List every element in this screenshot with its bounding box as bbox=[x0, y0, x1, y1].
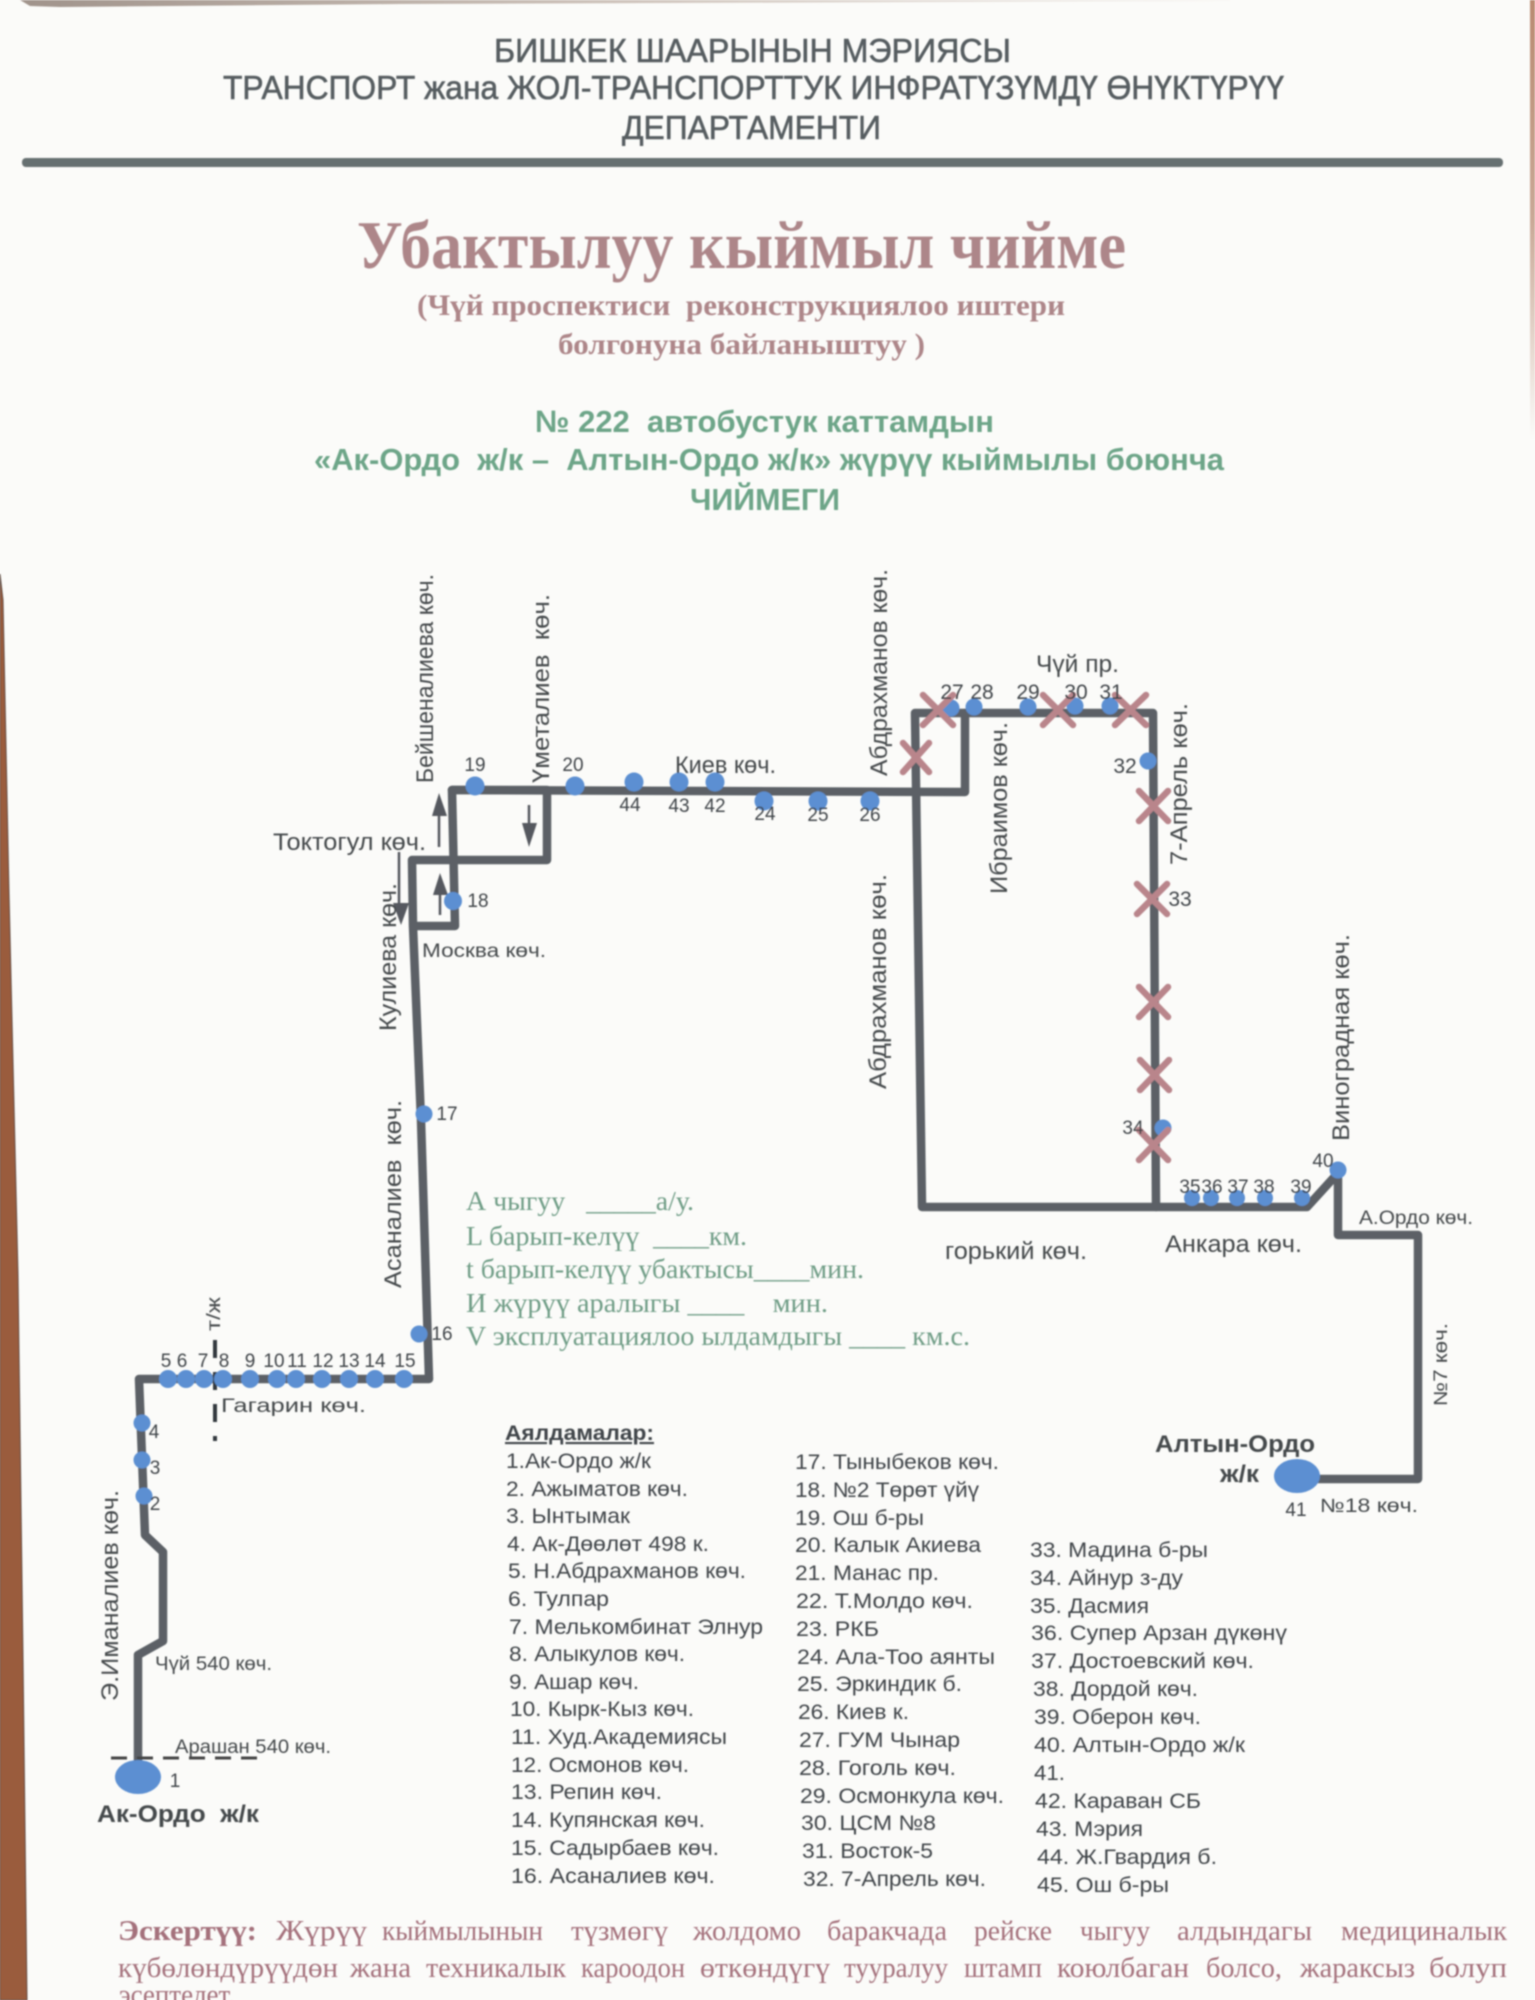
note: чыгуу bbox=[1080, 1916, 1150, 1947]
note: баракчада bbox=[827, 1916, 948, 1947]
note bbox=[118, 1916, 1507, 2000]
stops list: column 1: 6. Тулпар bbox=[508, 1588, 609, 1611]
subtitle bbox=[417, 289, 1065, 361]
stops list: column 2: 32. 7-Апрель көч. bbox=[803, 1868, 986, 1891]
stops list: column 1: 10. Кырк-Кыз көч. bbox=[510, 1698, 694, 1721]
stop numbers: 15 bbox=[394, 1351, 416, 1372]
stop numbers: 7 bbox=[198, 1351, 208, 1372]
route heading: ЧИЙМЕГИ bbox=[690, 481, 840, 517]
stop numbers: 18 bbox=[467, 891, 489, 912]
stops list: column 1: 1.Ак-Ордо ж/к bbox=[506, 1450, 652, 1473]
stops list: column 2: 31. Восток-5 bbox=[802, 1840, 933, 1863]
stops list: column 1 bbox=[506, 1450, 763, 1888]
note: күбөлөндүрүүдөн bbox=[118, 1953, 338, 1984]
stop numbers: 24 bbox=[754, 804, 776, 825]
stops list: column 1: 14. Купянская көч. bbox=[511, 1809, 705, 1832]
stop numbers: 35 bbox=[1179, 1177, 1201, 1198]
title: Убактылуу кыймыл чийме bbox=[357, 207, 1126, 283]
stops list: column 2: 24. Ала-Тоо аянты bbox=[797, 1646, 995, 1669]
stops list: column 1: 5. Н.Абдрахманов көч. bbox=[508, 1560, 746, 1583]
note: техникалык bbox=[426, 1953, 566, 1984]
stops list: column 2: 19. Ош б-ры bbox=[795, 1507, 924, 1530]
stop numbers bbox=[149, 681, 1334, 1792]
stop numbers: 43 bbox=[668, 796, 690, 817]
stops list: column 1: 8. Алыкулов көч. bbox=[509, 1643, 685, 1666]
street labels: Токтогул көч. bbox=[273, 829, 426, 856]
stops list: column 3: 41. bbox=[1034, 1762, 1065, 1785]
note: Жүрүү bbox=[276, 1916, 367, 1947]
street labels: Чүй 540 көч. bbox=[155, 1654, 272, 1675]
stops list: column 3: 37. Достоевский көч. bbox=[1031, 1650, 1254, 1673]
street labels: Э.Иманалиев көч. bbox=[97, 1490, 124, 1701]
stop numbers: 42 bbox=[704, 796, 726, 817]
closed section crosses bbox=[903, 695, 1169, 1160]
stop numbers: 40 bbox=[1312, 1151, 1334, 1172]
street labels: Ак-Ордо ж/к bbox=[97, 1801, 260, 1828]
street labels: горький көч. bbox=[945, 1238, 1087, 1265]
note: штамп bbox=[964, 1953, 1042, 1984]
note: рейске bbox=[974, 1916, 1052, 1947]
route heading bbox=[314, 404, 1225, 517]
route parameters bbox=[466, 1186, 970, 1351]
stop numbers: 8 bbox=[219, 1351, 229, 1372]
route map bbox=[97, 569, 1473, 1828]
street labels: №18 көч. bbox=[1320, 1496, 1418, 1517]
street labels: Арашан 540 көч. bbox=[175, 1737, 331, 1758]
stops list: column 1: 4. Ак-Дөөлөт 498 к. bbox=[507, 1533, 709, 1556]
stops list: column 3: 45. Ош б-ры bbox=[1037, 1874, 1169, 1897]
route line bbox=[138, 713, 1418, 1763]
street labels: Гагарин көч. bbox=[221, 1396, 366, 1417]
street labels: т/ж bbox=[204, 1297, 225, 1331]
route heading: «Ак-Ордо ж/к – Алтын-Ордо ж/к» жүрүү кыймылы боюнча bbox=[314, 442, 1225, 477]
street labels bbox=[97, 569, 1473, 1828]
street labels: Чүй пр. bbox=[1036, 651, 1119, 678]
stop numbers: 11 bbox=[287, 1351, 307, 1372]
note: медициналык bbox=[1341, 1916, 1507, 1947]
stops list: column 3: 42. Караван СБ bbox=[1035, 1790, 1201, 1813]
note: Эскертүү: bbox=[118, 1916, 257, 1947]
stop numbers: 16 bbox=[431, 1324, 453, 1345]
stops list: column 2: 28. Гоголь көч. bbox=[799, 1757, 956, 1780]
header: department name: ДЕПАРТАМЕНТИ bbox=[622, 109, 881, 146]
stop numbers: 37 bbox=[1227, 1177, 1249, 1198]
street labels: Абдрахманов көч. bbox=[866, 569, 893, 776]
paper edge: top streak bbox=[20, 0, 1230, 7]
stop numbers: 41 bbox=[1285, 1500, 1307, 1521]
note: алдындагы bbox=[1177, 1916, 1312, 1947]
route parameters: L барып-келүү ____км. bbox=[466, 1221, 747, 1251]
route parameters: А чыгуу _____а/у. bbox=[466, 1186, 694, 1216]
street labels: Асаналиев көч. bbox=[380, 1100, 407, 1288]
street labels: Ибраимов көч. bbox=[986, 722, 1013, 894]
stops list: column 1: 11. Худ.Академиясы bbox=[511, 1726, 727, 1749]
stops list: column 2: 30. ЦСМ №8 bbox=[801, 1812, 936, 1835]
street labels: №7 көч. bbox=[1431, 1323, 1452, 1406]
street labels: Үметалиев көч. bbox=[528, 594, 555, 783]
railway crossing dashes bbox=[111, 1340, 263, 1758]
street labels: А.Ордо көч. bbox=[1359, 1208, 1473, 1229]
street labels: Алтын-Ордо bbox=[1155, 1431, 1315, 1458]
subtitle: (Чүй проспектиси реконструкциялоо иштери bbox=[417, 289, 1065, 322]
stops bbox=[115, 698, 1346, 1794]
stops list: column 1: 9. Ашар көч. bbox=[509, 1671, 639, 1694]
note: кыймылынын bbox=[382, 1916, 543, 1947]
stops list: column 3: 34. Айнур з-ду bbox=[1030, 1567, 1184, 1590]
stop numbers: 29 bbox=[1016, 681, 1040, 704]
stop numbers: 14 bbox=[364, 1351, 386, 1372]
stop numbers: 6 bbox=[177, 1351, 187, 1372]
stop numbers: 4 bbox=[149, 1422, 160, 1443]
street labels: Анкара көч. bbox=[1165, 1231, 1302, 1258]
stop numbers: 33 bbox=[1168, 888, 1192, 911]
stop numbers: 38 bbox=[1253, 1177, 1275, 1198]
stops list: column 2 bbox=[795, 1451, 1004, 1891]
stop numbers: 20 bbox=[562, 755, 584, 776]
note: болуп bbox=[1429, 1953, 1507, 1984]
note: коюлбаган bbox=[1057, 1953, 1189, 1984]
stops list: column 2: 25. Эркиндик б. bbox=[797, 1673, 962, 1696]
stop numbers: 3 bbox=[150, 1458, 160, 1479]
street labels: Виноградная көч. bbox=[1328, 934, 1355, 1141]
stops list: column 2: 21. Манас пр. bbox=[795, 1562, 939, 1585]
stop numbers: 34 bbox=[1122, 1118, 1144, 1139]
note: болсо, bbox=[1206, 1953, 1282, 1984]
stops list: column 2: 18. №2 Төрөт үйү bbox=[795, 1479, 980, 1502]
street labels: Абдрахманов көч. bbox=[865, 874, 892, 1089]
subtitle: болгонуна байланыштуу ) bbox=[558, 328, 925, 361]
street labels: Москва көч. bbox=[422, 941, 546, 962]
note: кароодон bbox=[581, 1953, 685, 1984]
stops list: column 2: 20. Калык Акиева bbox=[795, 1534, 981, 1557]
stop numbers: 12 bbox=[312, 1351, 334, 1372]
stops list: column 3: 43. Мэрия bbox=[1036, 1818, 1143, 1841]
stop numbers: 19 bbox=[464, 755, 486, 776]
street labels: ж/к bbox=[1219, 1461, 1260, 1488]
note: өткөндүгү bbox=[700, 1953, 830, 1984]
stops list: column 1: 13. Репин көч. bbox=[511, 1781, 662, 1804]
stop numbers: 5 bbox=[161, 1351, 171, 1372]
stop numbers: 39 bbox=[1290, 1177, 1312, 1198]
stops list: column 3: 44. Ж.Гвардия б. bbox=[1037, 1846, 1217, 1869]
stop numbers: 31 bbox=[1099, 681, 1123, 704]
note: тууралуу bbox=[844, 1953, 948, 1984]
stops list: column 2: 22. Т.Молдо көч. bbox=[796, 1590, 973, 1613]
route parameters: t барып-келүү убактысы____мин. bbox=[466, 1254, 864, 1284]
street labels: 7-Апрель көч. bbox=[1166, 703, 1193, 865]
stops list: column 2: 29. Осмонкула көч. bbox=[800, 1785, 1004, 1808]
stop numbers: 28 bbox=[970, 681, 994, 704]
street labels: Бейшеналиева көч. bbox=[412, 574, 439, 783]
stops list: column 3: 36. Супер Арзан дүкөнү bbox=[1031, 1622, 1288, 1645]
paper edge: right top strip bbox=[1530, 0, 1535, 440]
stops list: column 1: 2. Ажыматов көч. bbox=[506, 1478, 688, 1501]
stop numbers: 9 bbox=[245, 1351, 255, 1372]
stops list: column 2: 26. Киев к. bbox=[798, 1701, 909, 1724]
stop numbers: 13 bbox=[338, 1351, 360, 1372]
stops list: column 1: 15. Садырбаев көч. bbox=[511, 1837, 719, 1860]
stop numbers: 32 bbox=[1113, 755, 1137, 778]
paper edge: brown table strip bbox=[0, 574, 27, 2000]
stop numbers: 30 bbox=[1064, 681, 1088, 704]
street labels: Киев көч. bbox=[675, 752, 776, 779]
stop numbers: 36 bbox=[1201, 1177, 1223, 1198]
stops list: column 3: 35. Дасмия bbox=[1030, 1595, 1149, 1618]
header: department name: БИШКЕК ШААРЫНЫН МЭРИЯСЫ bbox=[494, 32, 1011, 69]
header: department name: ТРАНСПОРТ жана ЖОЛ-ТРАНСПОРТТУК ИНФРАТҮЗҮМДҮ ӨНҮКТҮРҮҮ bbox=[223, 69, 1285, 106]
stops list: column 3: 40. Алтын-Ордо ж/к bbox=[1034, 1734, 1246, 1757]
stops list: column 1: 12. Осмонов көч. bbox=[511, 1754, 689, 1777]
stop numbers: 44 bbox=[619, 795, 641, 816]
note: жана bbox=[349, 1953, 412, 1984]
stops list: column 1: 3. Ынтымак bbox=[506, 1505, 631, 1528]
header rule bbox=[22, 158, 1503, 167]
stop numbers: 27 bbox=[940, 681, 964, 704]
stops list: column 2: 17. Тыныбеков көч. bbox=[795, 1451, 999, 1474]
stop numbers: 25 bbox=[807, 805, 829, 826]
stops list: column 3: 38. Дордой көч. bbox=[1033, 1678, 1198, 1701]
stop numbers: 2 bbox=[150, 1494, 160, 1515]
header: department name bbox=[223, 32, 1285, 146]
stops list heading: Аялдамалар: bbox=[505, 1422, 654, 1445]
stop numbers: 1 bbox=[170, 1771, 180, 1792]
stops list: column 1: 16. Асаналиев көч. bbox=[511, 1865, 715, 1888]
stop numbers: 17 bbox=[436, 1104, 458, 1125]
note: жолдомо bbox=[692, 1916, 801, 1947]
route heading: № 222 автобустук каттамдын bbox=[535, 404, 994, 439]
route parameters: И жүрүү аралыгы ____ мин. bbox=[466, 1288, 828, 1318]
note: түзмөгү bbox=[571, 1916, 668, 1947]
stops list: column 3: 33. Мадина б-ры bbox=[1030, 1539, 1208, 1562]
stops list: column 2: 27. ГУМ Чынар bbox=[799, 1729, 960, 1752]
stops list: column 2: 23. РКБ bbox=[796, 1618, 879, 1641]
stop numbers: 26 bbox=[859, 805, 881, 826]
stops list: column 3: 39. Оберон көч. bbox=[1034, 1706, 1201, 1729]
note: жараксыз bbox=[1299, 1953, 1415, 1984]
stops list: column 3 bbox=[1030, 1539, 1288, 1897]
route parameters: V эксплуатациялоо ылдамдыгы ____ км.с. bbox=[466, 1321, 970, 1351]
direction arrows bbox=[393, 793, 537, 925]
street labels: Кулиева көч. bbox=[375, 883, 402, 1031]
stop numbers: 10 bbox=[263, 1351, 285, 1372]
stops list: column 1: 7. Мелькомбинат Элнур bbox=[509, 1616, 763, 1639]
